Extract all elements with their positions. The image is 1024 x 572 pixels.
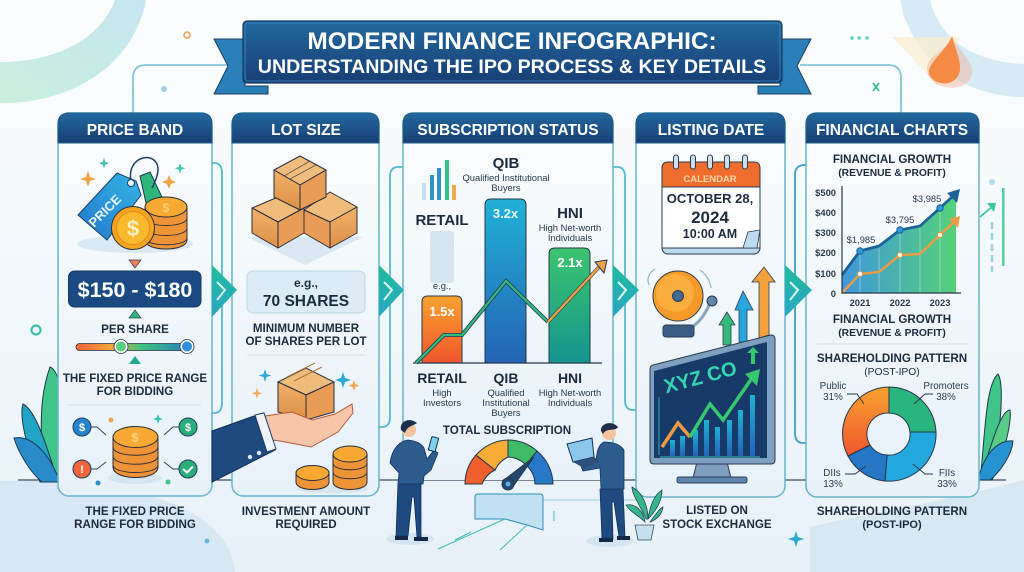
icon: calendar	[662, 155, 760, 254]
text: fixed price range	[63, 372, 207, 398]
icon: price tag and coins: PRICE	[85, 191, 124, 230]
labels: investor categories: RETAIL	[417, 370, 467, 386]
icon: box on hand with suit arm	[212, 363, 360, 482]
panel: price band	[58, 113, 212, 496]
icon: mini bars	[422, 160, 456, 200]
icon: calendar: OCTOBER 28,	[667, 191, 753, 206]
area chart: revenue and profit: 2022	[890, 297, 910, 308]
icon: coin stack with status badges: $	[131, 430, 139, 445]
donut chart: shareholding pattern: 31%	[823, 392, 843, 403]
caption: price band: THE FIXED PRICE	[85, 505, 185, 518]
labels: investor categories: HNI	[558, 370, 582, 386]
text: minimum shares: MINIMUM NUMBER	[253, 322, 360, 335]
side brackets behind panels	[212, 160, 996, 443]
label: HNI top	[539, 205, 601, 243]
text: shareholding pattern top	[817, 352, 967, 378]
area chart: revenue and profit: $3,985	[913, 193, 941, 204]
area chart: revenue and profit: $400	[815, 207, 836, 218]
text: per share: PER SHARE	[101, 323, 169, 336]
area chart: revenue and profit: $100	[815, 268, 836, 279]
gauge	[465, 440, 553, 490]
labels: investor categories: High Net-worth	[539, 387, 601, 398]
bar chart: subscription multiples: 2.1x	[557, 255, 583, 270]
caption: listing date: STOCK EXCHANGE	[662, 518, 772, 531]
donut chart: shareholding pattern: Public	[820, 381, 846, 392]
icon: coin stack with status badges: $	[79, 422, 85, 434]
text: financial growth below: FINANCIAL GROWTH	[833, 313, 951, 326]
donut chart: shareholding pattern: 33%	[937, 479, 957, 490]
text: minimum shares	[245, 322, 367, 348]
icon: orange droplet	[892, 36, 973, 88]
panel: subscription status	[403, 113, 613, 550]
text: financial growth below	[833, 313, 951, 339]
caption: lot size	[242, 505, 370, 531]
icon: stock monitor: XYZ CO	[662, 358, 739, 398]
icon: calendar: 10:00 AM	[683, 227, 737, 241]
lot size value box	[247, 271, 365, 313]
caption: listing date	[662, 504, 772, 531]
text: financial growth top: (REVENUE & PROFIT)	[838, 168, 946, 179]
heading: subscription status: SUBSCRIPTION STATUS	[417, 122, 599, 139]
area chart: revenue and profit: $300	[815, 227, 836, 238]
text: fixed price range: FOR BIDDING	[97, 385, 173, 398]
icon: rising arrows	[719, 267, 775, 345]
label: QIB top: QIB	[493, 155, 519, 172]
person with laptop	[567, 423, 634, 547]
speech box	[438, 494, 554, 550]
donut chart: shareholding pattern	[820, 381, 969, 490]
caption: financial charts: SHAREHOLDING PATTERN	[817, 505, 967, 518]
heading: listing date: LISTING DATE	[658, 122, 764, 139]
text: minimum shares: OF SHARES PER LOT	[245, 335, 367, 348]
labels: investor categories	[417, 370, 601, 418]
panel: lot size	[212, 113, 379, 496]
price range slider	[76, 340, 194, 354]
icon: price tag and coins: $	[127, 216, 139, 241]
bar chart: subscription multiples: e.g.,	[433, 280, 451, 291]
heading: price band: PRICE BAND	[87, 122, 183, 139]
lot size value box: e.g.,	[294, 276, 318, 290]
caption: lot size: INVESTMENT AMOUNT	[242, 505, 370, 518]
labels: investor categories: QIB	[494, 370, 518, 386]
panel: listing date	[636, 113, 785, 497]
icon: calendar: CALENDAR	[683, 174, 737, 185]
text: financial growth top: FINANCIAL GROWTH	[833, 153, 951, 166]
donut chart: shareholding pattern: 13%	[823, 479, 843, 490]
text: financial growth top	[833, 153, 951, 179]
area chart: revenue and profit: 2023	[930, 297, 950, 308]
donut chart: shareholding pattern: DIIs	[823, 468, 841, 479]
plant pot	[626, 487, 663, 540]
text: financial growth below: (REVENUE & PROFIT)	[838, 328, 946, 339]
label: HNI top: High Net-worth	[539, 222, 601, 233]
labels: investor categories: Buyers	[491, 407, 521, 418]
donut chart: shareholding pattern: 38%	[936, 392, 956, 403]
label: retail top: RETAIL	[415, 212, 469, 229]
icon: investment coins	[296, 446, 368, 493]
title banner	[214, 21, 811, 94]
title: UNDERSTANDING THE IPO PROCESS & KEY DETAILS	[258, 56, 766, 78]
plant left	[14, 367, 64, 482]
area chart: revenue and profit: $200	[815, 247, 836, 258]
icon: listing bell	[648, 269, 717, 337]
label: QIB top: Buyers	[491, 182, 521, 193]
caption: price band	[74, 505, 196, 531]
plant right	[978, 374, 1013, 480]
text: total subscription: TOTAL SUBSCRIPTION	[443, 424, 571, 437]
area chart: revenue and profit: $500	[815, 187, 836, 198]
price value box	[68, 271, 201, 307]
icon: calendar: 2024	[691, 208, 729, 227]
icon: coin stack with status badges: !	[80, 464, 84, 476]
label: QIB top	[462, 155, 550, 193]
text: shareholding pattern top: (POST-IPO)	[864, 367, 920, 378]
text: fixed price range: THE FIXED PRICE RANGE	[63, 372, 207, 385]
labels: investor categories: Qualified	[487, 387, 525, 398]
bar chart: subscription multiples: 3.2x	[493, 206, 519, 221]
lot size value box: 70 SHARES	[263, 293, 349, 310]
label: QIB top: Qualified Institutional	[462, 172, 550, 183]
caption: listing date: LISTED ON	[686, 504, 748, 517]
area chart: revenue and profit	[815, 186, 961, 308]
area chart: revenue and profit: 0	[831, 288, 836, 299]
heading: lot size: LOT SIZE	[271, 122, 341, 139]
area chart: revenue and profit: 2021	[850, 297, 870, 308]
caption: financial charts	[817, 505, 967, 531]
donut chart: shareholding pattern: FIIs	[939, 468, 955, 479]
title	[258, 28, 766, 78]
title: MODERN FINANCE INFOGRAPHIC:	[307, 28, 717, 55]
connector frame	[133, 65, 901, 113]
arrow: listing to charts	[785, 265, 812, 317]
caption: financial charts: (POST-IPO)	[862, 519, 922, 531]
icon: price tag and coins	[77, 158, 193, 253]
person with phone	[386, 420, 439, 545]
caption: lot size: REQUIRED	[275, 518, 337, 531]
icon: stacked cartons	[247, 156, 363, 265]
icon: price tag and coins: $	[163, 201, 170, 215]
text: shareholding pattern top: SHAREHOLDING PATTERN	[817, 352, 967, 365]
icon: coin stack with status badges	[73, 414, 197, 486]
price value box: $150 - $180	[78, 278, 192, 302]
icon: coin stack with status badges: $	[185, 422, 191, 434]
labels: investor categories: High	[432, 387, 452, 398]
labels: investor categories: Investors	[423, 397, 461, 408]
heading: financial charts: FINANCIAL CHARTS	[816, 122, 968, 139]
arrow: price band to lot size	[212, 265, 237, 317]
labels: investor categories: Institutional	[482, 397, 530, 408]
icon: stock monitor	[650, 335, 775, 483]
arrow: subscription to listing	[613, 265, 639, 317]
label: HNI top: Individuals	[548, 232, 592, 243]
area chart: revenue and profit: $1,985	[847, 234, 875, 245]
donut chart: shareholding pattern: Promoters	[923, 381, 969, 392]
panel: financial charts	[806, 113, 979, 497]
arrow: lot size to subscription	[379, 265, 404, 317]
label: HNI top: HNI	[557, 205, 583, 222]
labels: investor categories: Individuals	[548, 397, 592, 408]
area chart: revenue and profit: $3,795	[886, 214, 914, 225]
bar chart: subscription multiples	[413, 199, 607, 363]
bar chart: subscription multiples: 1.5x	[429, 304, 455, 319]
caption: price band: RANGE FOR BIDDING	[74, 518, 196, 531]
